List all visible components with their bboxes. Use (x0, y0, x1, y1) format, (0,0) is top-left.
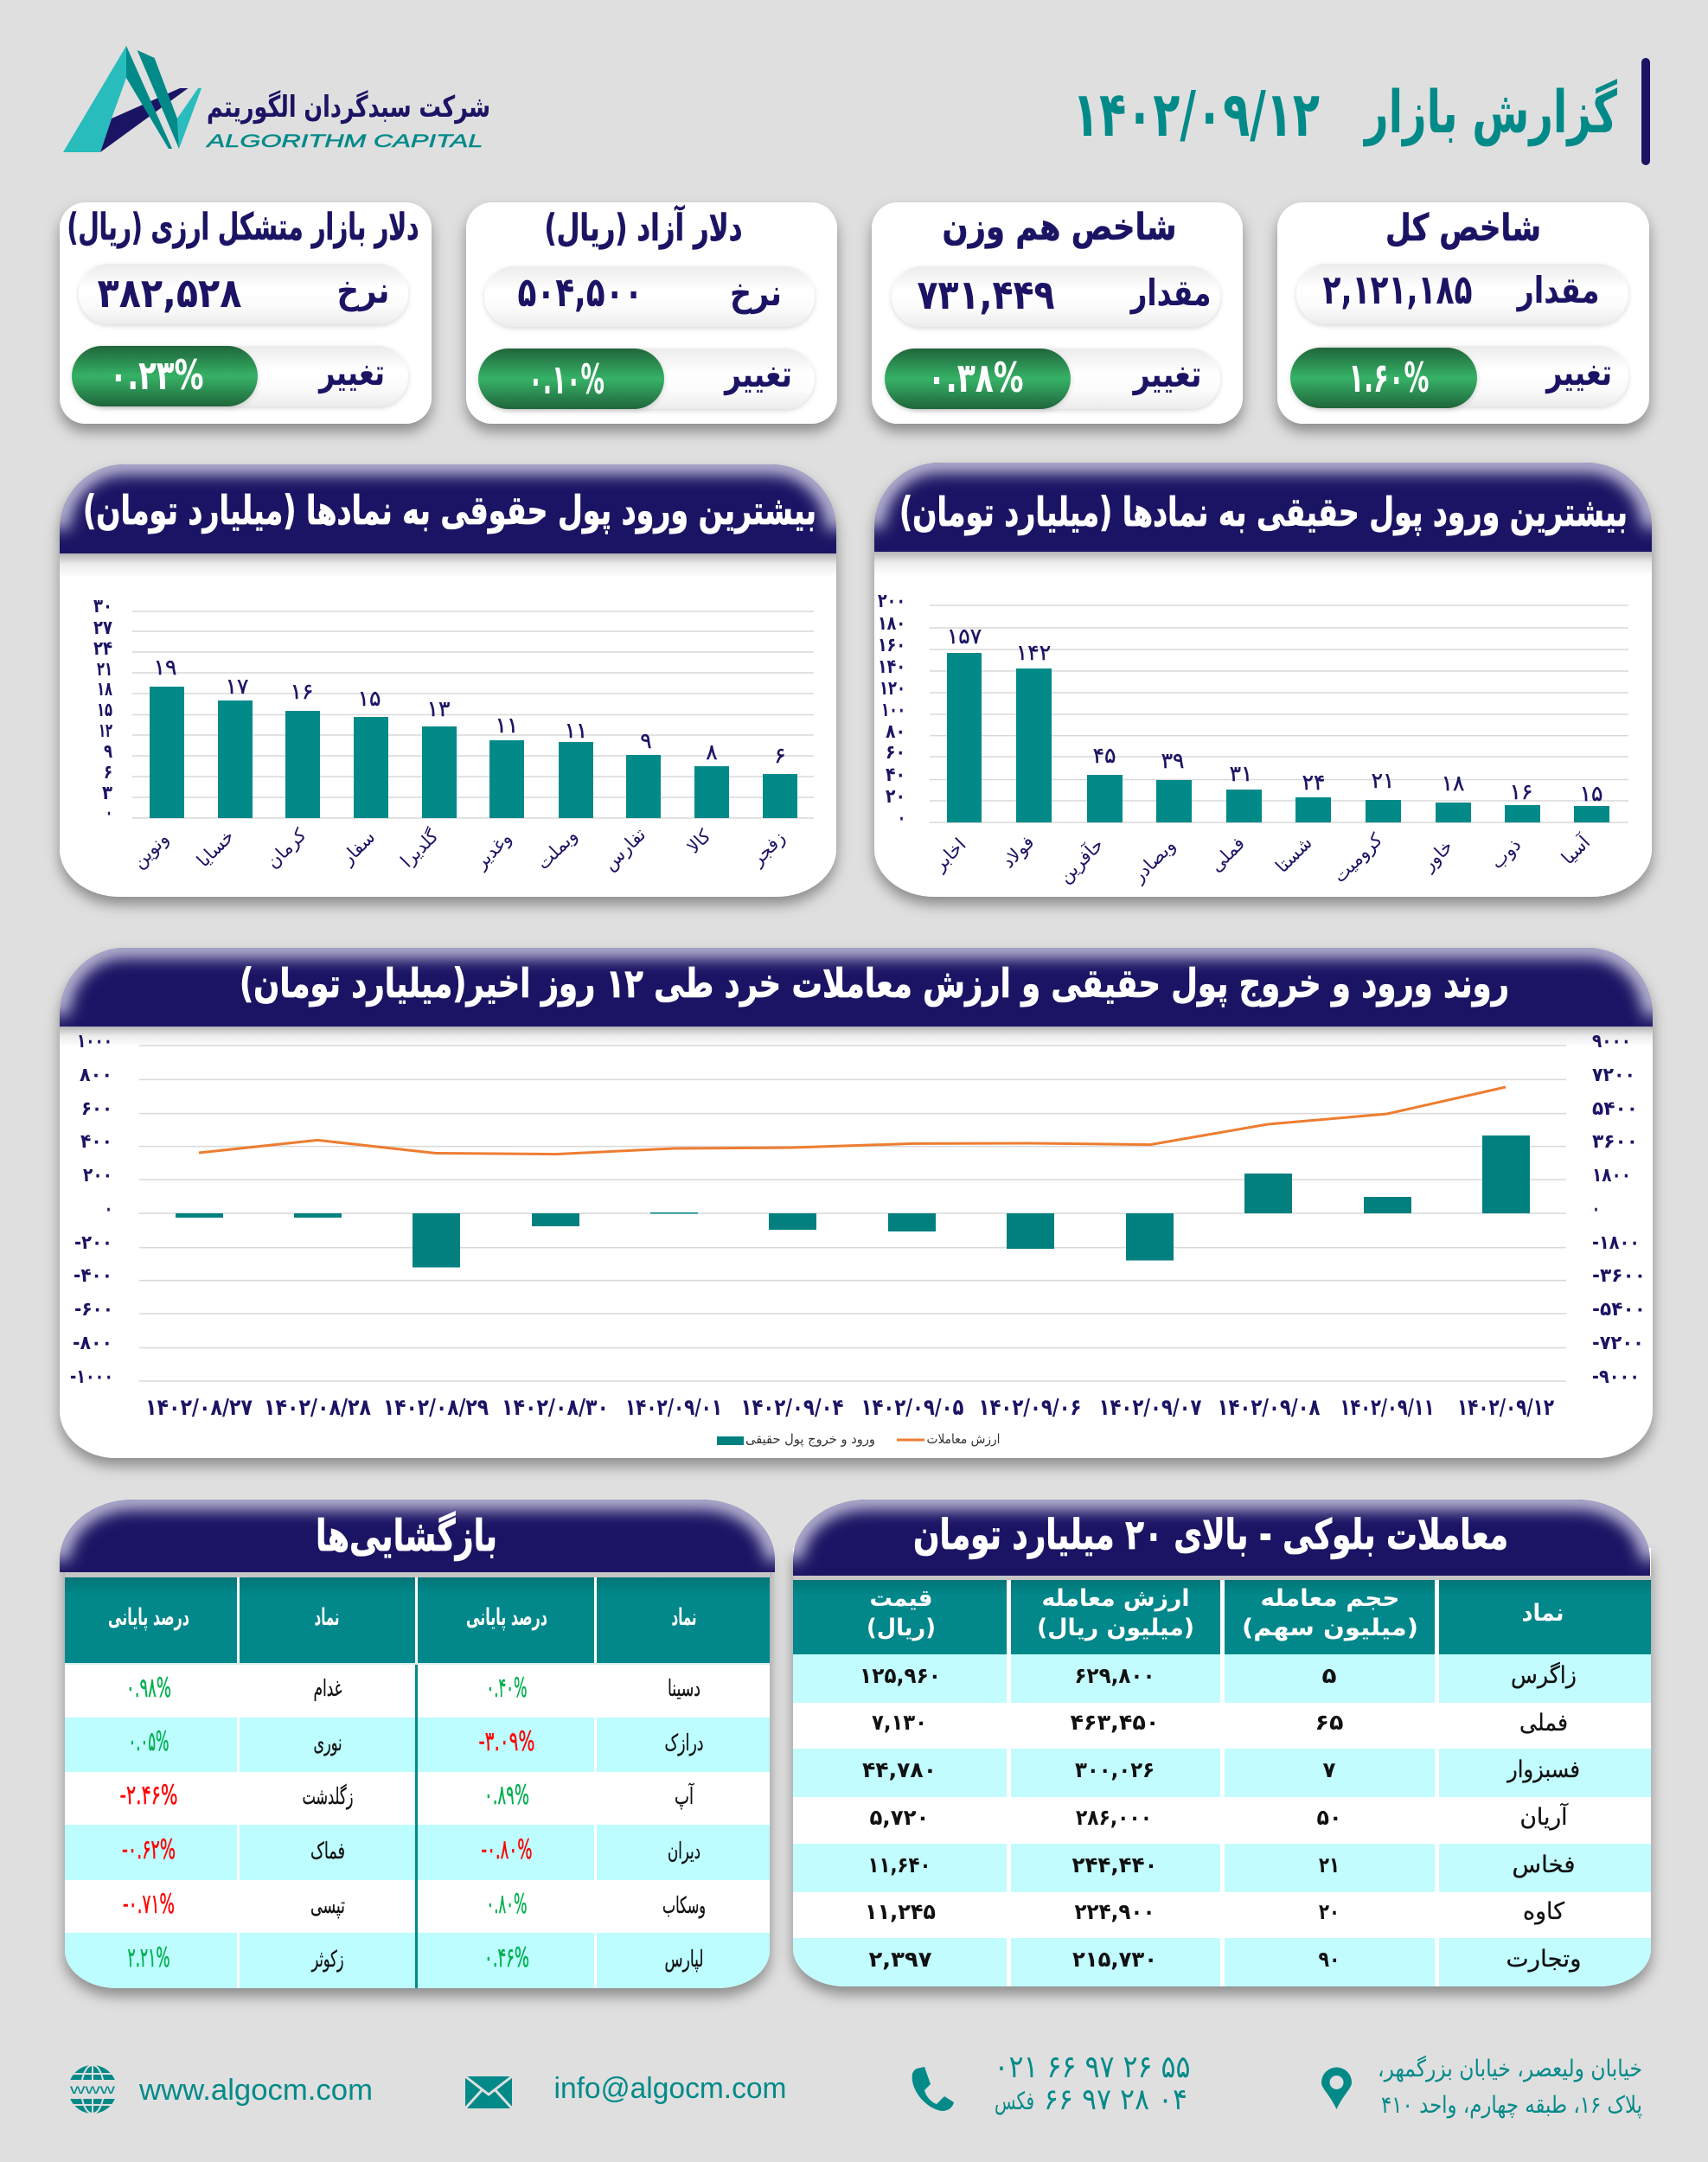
table rows: ۹۰ (1318, 1947, 1340, 1972)
panel: reopenings table (60, 1500, 775, 1988)
heading bar: معاملات بلوکی - بالای ۲۰ میلیارد تومان (913, 1511, 1508, 1559)
heading bar (874, 463, 1652, 552)
table rows: ۰.۸۹% (484, 1780, 529, 1811)
address: پلاک ۱۶، طبقه چهارم، واحد ۴۱۰ (1381, 2092, 1642, 2119)
data labels: ۲۴ (1302, 770, 1325, 795)
date axis labels: ۱۴۰۲/۰۹/۰۴ (740, 1395, 844, 1421)
value pill (79, 264, 408, 324)
table rows: زکوثر (310, 1947, 344, 1973)
table rows: -۰.۶۲% (122, 1834, 176, 1865)
data labels: ۹ (640, 728, 652, 753)
panel: real money inflow chart (874, 463, 1652, 897)
table rows: -۰.۷۱% (123, 1889, 175, 1920)
data labels: ۶ (774, 743, 786, 768)
net flow bars (176, 1135, 1530, 1268)
y axis labels: ۲۰ (886, 786, 905, 808)
panel: organized exchange dollar card (60, 202, 432, 424)
table rows: ۲۰ (1319, 1899, 1340, 1924)
right y axis labels: ۵۴۰۰ (1592, 1098, 1638, 1120)
data labels: ۱۶ (291, 679, 313, 704)
panel: block trades table (793, 1500, 1651, 1986)
table rows: آریان (1520, 1803, 1569, 1831)
change pill (1290, 346, 1628, 408)
table rows: غدام (313, 1676, 342, 1702)
right y axis labels (1592, 1031, 1646, 1388)
left y axis labels: ۲۰۰ (83, 1165, 112, 1187)
value pill: مقدار (1129, 272, 1211, 314)
right y axis labels: -۷۲۰۰ (1592, 1333, 1644, 1354)
category labels: تفارس (599, 824, 649, 874)
table rows: ۲,۳۹۷ (868, 1947, 932, 1972)
bars (150, 687, 797, 818)
card title: شاخص هم وزن (943, 206, 1176, 249)
table rows: ۵,۷۲۰ (870, 1805, 929, 1830)
date axis labels: ۱۴۰۲/۰۹/۱۲ (1457, 1395, 1554, 1421)
left y axis labels: ۰ (105, 1199, 112, 1220)
category labels: شستا (1271, 832, 1316, 877)
address (1378, 2055, 1642, 2119)
data labels: ۱۴۲ (1016, 640, 1051, 665)
y axis labels: ۴۰ (886, 764, 905, 786)
right y axis labels: ۱۸۰۰ (1592, 1165, 1631, 1187)
table rows: ۵۰ (1316, 1805, 1342, 1830)
table rows: فسبزوار (1506, 1756, 1580, 1783)
value pill (892, 266, 1220, 327)
table rows: ۰.۹۸% (126, 1673, 171, 1704)
y axis labels: ۱۶۰ (878, 635, 905, 656)
table rows: -۲.۴۶% (119, 1780, 178, 1811)
y axis labels: ۶ (104, 762, 112, 784)
logo (63, 46, 490, 152)
right y axis labels: -۹۰۰۰ (1592, 1366, 1640, 1388)
table rows: فخاس (1512, 1852, 1576, 1878)
change pill: ۱.۶۰% (1349, 355, 1429, 402)
table rows: ۱۱,۶۴۰ (868, 1852, 931, 1877)
legend: ورود و خروج پول حقیقی (745, 1431, 875, 1448)
title: date: ۱۴۰۲/۰۹/۱۲ (1072, 78, 1320, 150)
value pill: ۳۸۲,۵۲۸ (97, 270, 242, 317)
table header: ارزش معامله (1041, 1585, 1190, 1612)
table rows: ۶۵ (1315, 1710, 1344, 1735)
category labels (128, 824, 790, 874)
category labels: خاور (1417, 836, 1457, 875)
category labels: فولاد (998, 832, 1038, 872)
left y axis labels: ۱۰۰۰ (77, 1031, 112, 1052)
table rows: ۵ (1321, 1663, 1337, 1688)
data labels: ۱۵ (358, 686, 381, 711)
table rows: دیران (668, 1839, 700, 1865)
date axis labels: ۱۴۰۲/۰۹/۰۵ (861, 1395, 964, 1421)
table rows: ۲۱ (1319, 1852, 1340, 1877)
table rows: ۲۴۴,۴۴۰ (1072, 1852, 1157, 1877)
data labels: ۱۳ (427, 696, 450, 721)
table rows: لپارس (664, 1947, 704, 1973)
y axis labels: ۱۸ (97, 679, 112, 700)
table rows: ۰.۰۵% (128, 1726, 170, 1757)
address: خیابان ولیعصر، خیابان بزرگمهر، (1378, 2055, 1642, 2082)
value pill: ۷۳۱,۴۴۹ (917, 272, 1055, 319)
data labels: ۱۵۷ (947, 624, 982, 649)
table header: (ریال) (867, 1615, 936, 1641)
data labels: ۱۱ (565, 718, 587, 743)
data labels: ۱۹ (154, 655, 176, 680)
website: www.algocm.com (138, 2074, 373, 2107)
table rows: آپ (675, 1782, 694, 1810)
date axis labels: ۱۴۰۲/۰۸/۲۸ (264, 1395, 371, 1421)
value pill: نرخ (730, 272, 782, 315)
date axis labels: ۱۴۰۲/۰۹/۱۱ (1340, 1395, 1434, 1421)
category labels: اخابر (929, 834, 970, 875)
data labels (154, 655, 786, 768)
heading bar: بازگشایی‌ها (316, 1511, 497, 1561)
y axis labels: ۳۰ (93, 596, 112, 617)
y axis labels: ۲۴ (93, 638, 112, 660)
category labels: وبملت (533, 825, 581, 873)
table rows: نوری (313, 1730, 342, 1756)
data labels: ۳۹ (1161, 748, 1184, 773)
data labels: ۱۱ (496, 713, 518, 738)
y axis labels: ۱۲۰ (880, 678, 905, 700)
table rows: ۴۶۳,۴۵۰ (1071, 1710, 1159, 1735)
value pill: ۲,۱۲۱,۱۸۵ (1323, 266, 1472, 314)
table header: درصد پایانی (108, 1604, 189, 1631)
panel: 12-day money flow combo chart (60, 948, 1653, 1458)
left y axis labels: ۸۰۰ (80, 1065, 112, 1086)
y axis labels: ۸۰ (886, 721, 905, 743)
table rows: -۰.۸۰% (481, 1834, 533, 1865)
y axis labels: ۱۵ (97, 700, 112, 721)
value pill: نرخ (337, 269, 389, 312)
card title: دلار آزاد (ریال) (545, 205, 742, 250)
data labels: ۱۶ (1510, 779, 1532, 804)
table rows: ۶۲۹,۸۰۰ (1074, 1663, 1155, 1688)
category labels: کالا (683, 826, 715, 858)
legend (717, 1431, 1000, 1448)
data labels: ۱۷ (226, 674, 248, 699)
date axis labels: ۱۴۰۲/۰۹/۰۷ (1098, 1395, 1202, 1421)
data labels: ۳۱ (1230, 761, 1252, 786)
table rows (860, 1661, 1581, 1973)
y axis labels: ۱۸۰ (878, 613, 905, 635)
right y axis labels: -۳۶۰۰ (1592, 1265, 1646, 1287)
category labels: سفار (336, 827, 379, 869)
y axis labels: ۱۴۰ (878, 656, 905, 678)
y axis labels: ۲۱ (97, 659, 112, 681)
category labels: ونوین (128, 828, 173, 873)
table rows (119, 1673, 706, 1973)
change pill: ۰.۱۰% (528, 356, 605, 404)
phone and fax numbers: ۶۶ ۹۷ ۲۸ ۰۴ (1044, 2082, 1187, 2117)
y axis labels: ۲۰۰ (878, 591, 905, 612)
y axis labels: ۳ (102, 783, 113, 804)
left y axis labels (70, 1031, 113, 1388)
phone and fax numbers: فکس (995, 2087, 1034, 2115)
value pill: مقدار (1516, 269, 1600, 311)
data labels: ۲۱ (1372, 768, 1394, 793)
change pill (72, 346, 408, 406)
data labels: ۱۵ (1580, 781, 1602, 806)
card title: دلار بازار متشکل ارزی (ریال) (67, 206, 419, 249)
y axis labels: ۲۷ (93, 617, 112, 639)
phone and fax numbers (995, 2050, 1190, 2117)
phone and fax numbers: ۰۲۱ ۶۶ ۹۷ ۲۶ ۵۵ (995, 2050, 1190, 2085)
category labels: آسیا (1557, 830, 1595, 868)
change pill: تغییر (317, 351, 385, 394)
table rows: وسکاب (662, 1893, 706, 1919)
left y axis labels: -۶۰۰ (74, 1299, 113, 1321)
table rows: ۷ (1323, 1757, 1335, 1782)
table rows: ۴۴,۷۸۰ (862, 1757, 937, 1782)
footer (66, 2050, 1642, 2119)
panel: total index card (1277, 202, 1649, 424)
right y axis labels: ۷۲۰۰ (1592, 1065, 1635, 1086)
value pill: ۵۰۴,۵۰۰ (517, 269, 643, 317)
table rows: ۲۲۴,۹۰۰ (1074, 1899, 1155, 1924)
heading bar (60, 464, 836, 553)
table header (867, 1585, 1564, 1641)
table rows: تپسی (310, 1893, 345, 1919)
category labels: ذوب (1487, 835, 1525, 873)
panel: legal money inflow chart (60, 464, 836, 897)
table header: نماد (1522, 1600, 1564, 1627)
email: info@algocm.com (553, 2072, 787, 2105)
icon: globe (66, 2065, 119, 2114)
table rows: ۷,۱۳۰ (872, 1710, 927, 1735)
right y axis labels: ۹۰۰۰ (1592, 1031, 1631, 1052)
category labels: حآفرین (1054, 834, 1108, 887)
bars (947, 653, 1609, 822)
y axis labels: ۹ (104, 741, 112, 763)
icon: envelope (465, 2076, 512, 2108)
data labels (947, 624, 1602, 806)
table header: درصد پایانی (466, 1604, 547, 1631)
date axis labels: ۱۴۰۲/۰۸/۲۷ (145, 1395, 253, 1421)
table header: قیمت (870, 1585, 932, 1612)
right y axis labels: -۱۸۰۰ (1592, 1232, 1640, 1254)
data labels: ۸ (706, 739, 718, 764)
right y axis labels: -۵۴۰۰ (1592, 1299, 1646, 1321)
category labels: وغدیر (470, 828, 515, 873)
date axis labels: ۱۴۰۲/۰۹/۰۱ (625, 1395, 722, 1421)
table rows: -۳.۰۹% (479, 1726, 534, 1757)
table rows: ۰.۸۰% (486, 1889, 528, 1920)
table rows: زگلدشت (303, 1783, 353, 1810)
y axis labels: ۰ (898, 808, 905, 829)
heading bar (60, 1500, 775, 1572)
legend: ارزش معاملات (927, 1431, 1000, 1447)
table rows: ۰.۴۰% (486, 1673, 528, 1704)
change pill (885, 349, 1220, 409)
table rows: فملی (1519, 1710, 1568, 1737)
table rows: ۲۱۵,۷۳۰ (1072, 1947, 1157, 1972)
category labels: گلدیرا (396, 825, 443, 872)
y axis labels (93, 596, 113, 824)
icon: globe: www (69, 2082, 116, 2097)
y axis labels: ۱۲ (99, 720, 112, 742)
category labels: کرومیت (1329, 829, 1386, 886)
icon: phone (912, 2067, 954, 2111)
table header: نماد (671, 1604, 697, 1631)
panel: equal weight index card (872, 202, 1243, 424)
table rows: ۲.۲۱% (128, 1942, 170, 1973)
heading bar: بیشترین ورود پول حقوقی به نمادها (میلیارد تومان) (83, 487, 816, 534)
table header: (میلیون ریال) (1037, 1615, 1194, 1641)
change pill: تغییر (1132, 353, 1202, 396)
change pill: تغییر (1545, 351, 1612, 394)
date axis labels (145, 1395, 1554, 1421)
table rows: وتجارت (1506, 1946, 1581, 1973)
icon: location pin (1321, 2067, 1352, 2109)
value pill (484, 266, 815, 327)
left y axis labels: -۲۰۰ (74, 1232, 112, 1254)
date axis labels: ۱۴۰۲/۰۸/۲۹ (383, 1395, 489, 1421)
heading bar (60, 948, 1653, 1027)
data labels: ۴۵ (1093, 743, 1116, 768)
category labels: وبصادر (1128, 835, 1180, 886)
value pill (1296, 264, 1628, 324)
table header: حجم معامله (1261, 1585, 1399, 1612)
logo persian name: شرکت سبدگردان الگوریتم (207, 90, 490, 125)
table rows: فماک (310, 1839, 345, 1865)
right y axis labels: ۳۶۰۰ (1592, 1131, 1638, 1153)
date axis labels: ۱۴۰۲/۰۹/۰۶ (979, 1395, 1081, 1421)
y axis labels: ۰ (106, 803, 112, 824)
change pill: تغییر (723, 353, 792, 396)
trade value line (199, 1087, 1506, 1155)
card title: شاخص کل (1385, 207, 1541, 250)
category labels: فملی (1206, 833, 1249, 876)
table rows: درازک (664, 1730, 704, 1756)
table rows: ۱۱,۲۴۵ (865, 1899, 936, 1924)
y axis labels: ۶۰ (886, 742, 905, 764)
y axis labels (878, 591, 905, 829)
date axis labels: ۱۴۰۲/۰۹/۰۸ (1218, 1395, 1321, 1421)
change pill: ۰.۲۳% (109, 352, 204, 400)
panel: free dollar card (466, 202, 837, 424)
table rows: زاگرس (1511, 1661, 1577, 1689)
table header: نماد (315, 1604, 339, 1631)
category labels: خسایا (193, 826, 238, 871)
right y axis labels: ۰ (1592, 1199, 1600, 1220)
table rows: ۰.۴۶% (484, 1942, 529, 1973)
date axis labels: ۱۴۰۲/۰۸/۳۰ (502, 1395, 609, 1421)
left y axis labels: ۴۰۰ (80, 1131, 112, 1153)
category labels: کرمان (262, 824, 310, 873)
logo mark (63, 46, 202, 152)
table rows: ۱۲۵,۹۶۰ (860, 1663, 941, 1688)
left y axis labels: -۴۰۰ (74, 1265, 112, 1287)
left y axis labels: -۱۰۰۰ (70, 1366, 113, 1388)
category labels (929, 829, 1595, 887)
logo latin name: ALGORITHM CAPITAL (205, 131, 483, 151)
heading bar (793, 1500, 1650, 1576)
table rows: کاوه (1523, 1898, 1564, 1925)
table header: (میلیون سهم) (1242, 1615, 1418, 1641)
table rows: ۲۸۶,۰۰۰ (1076, 1805, 1152, 1830)
change pill: ۰.۳۸% (927, 355, 1024, 402)
y axis labels: ۱۰۰ (881, 700, 905, 721)
data labels: ۱۸ (1442, 771, 1464, 796)
table header (108, 1604, 697, 1631)
left y axis labels: -۸۰۰ (73, 1333, 112, 1354)
change pill (478, 349, 815, 409)
table rows: دسینا (668, 1676, 700, 1702)
left y axis labels: ۶۰۰ (81, 1098, 112, 1120)
title accent bar (1641, 58, 1650, 165)
category labels: زفجر (746, 828, 790, 870)
table rows: ۳۰۰,۰۲۶ (1075, 1757, 1155, 1782)
title (1072, 58, 1650, 165)
